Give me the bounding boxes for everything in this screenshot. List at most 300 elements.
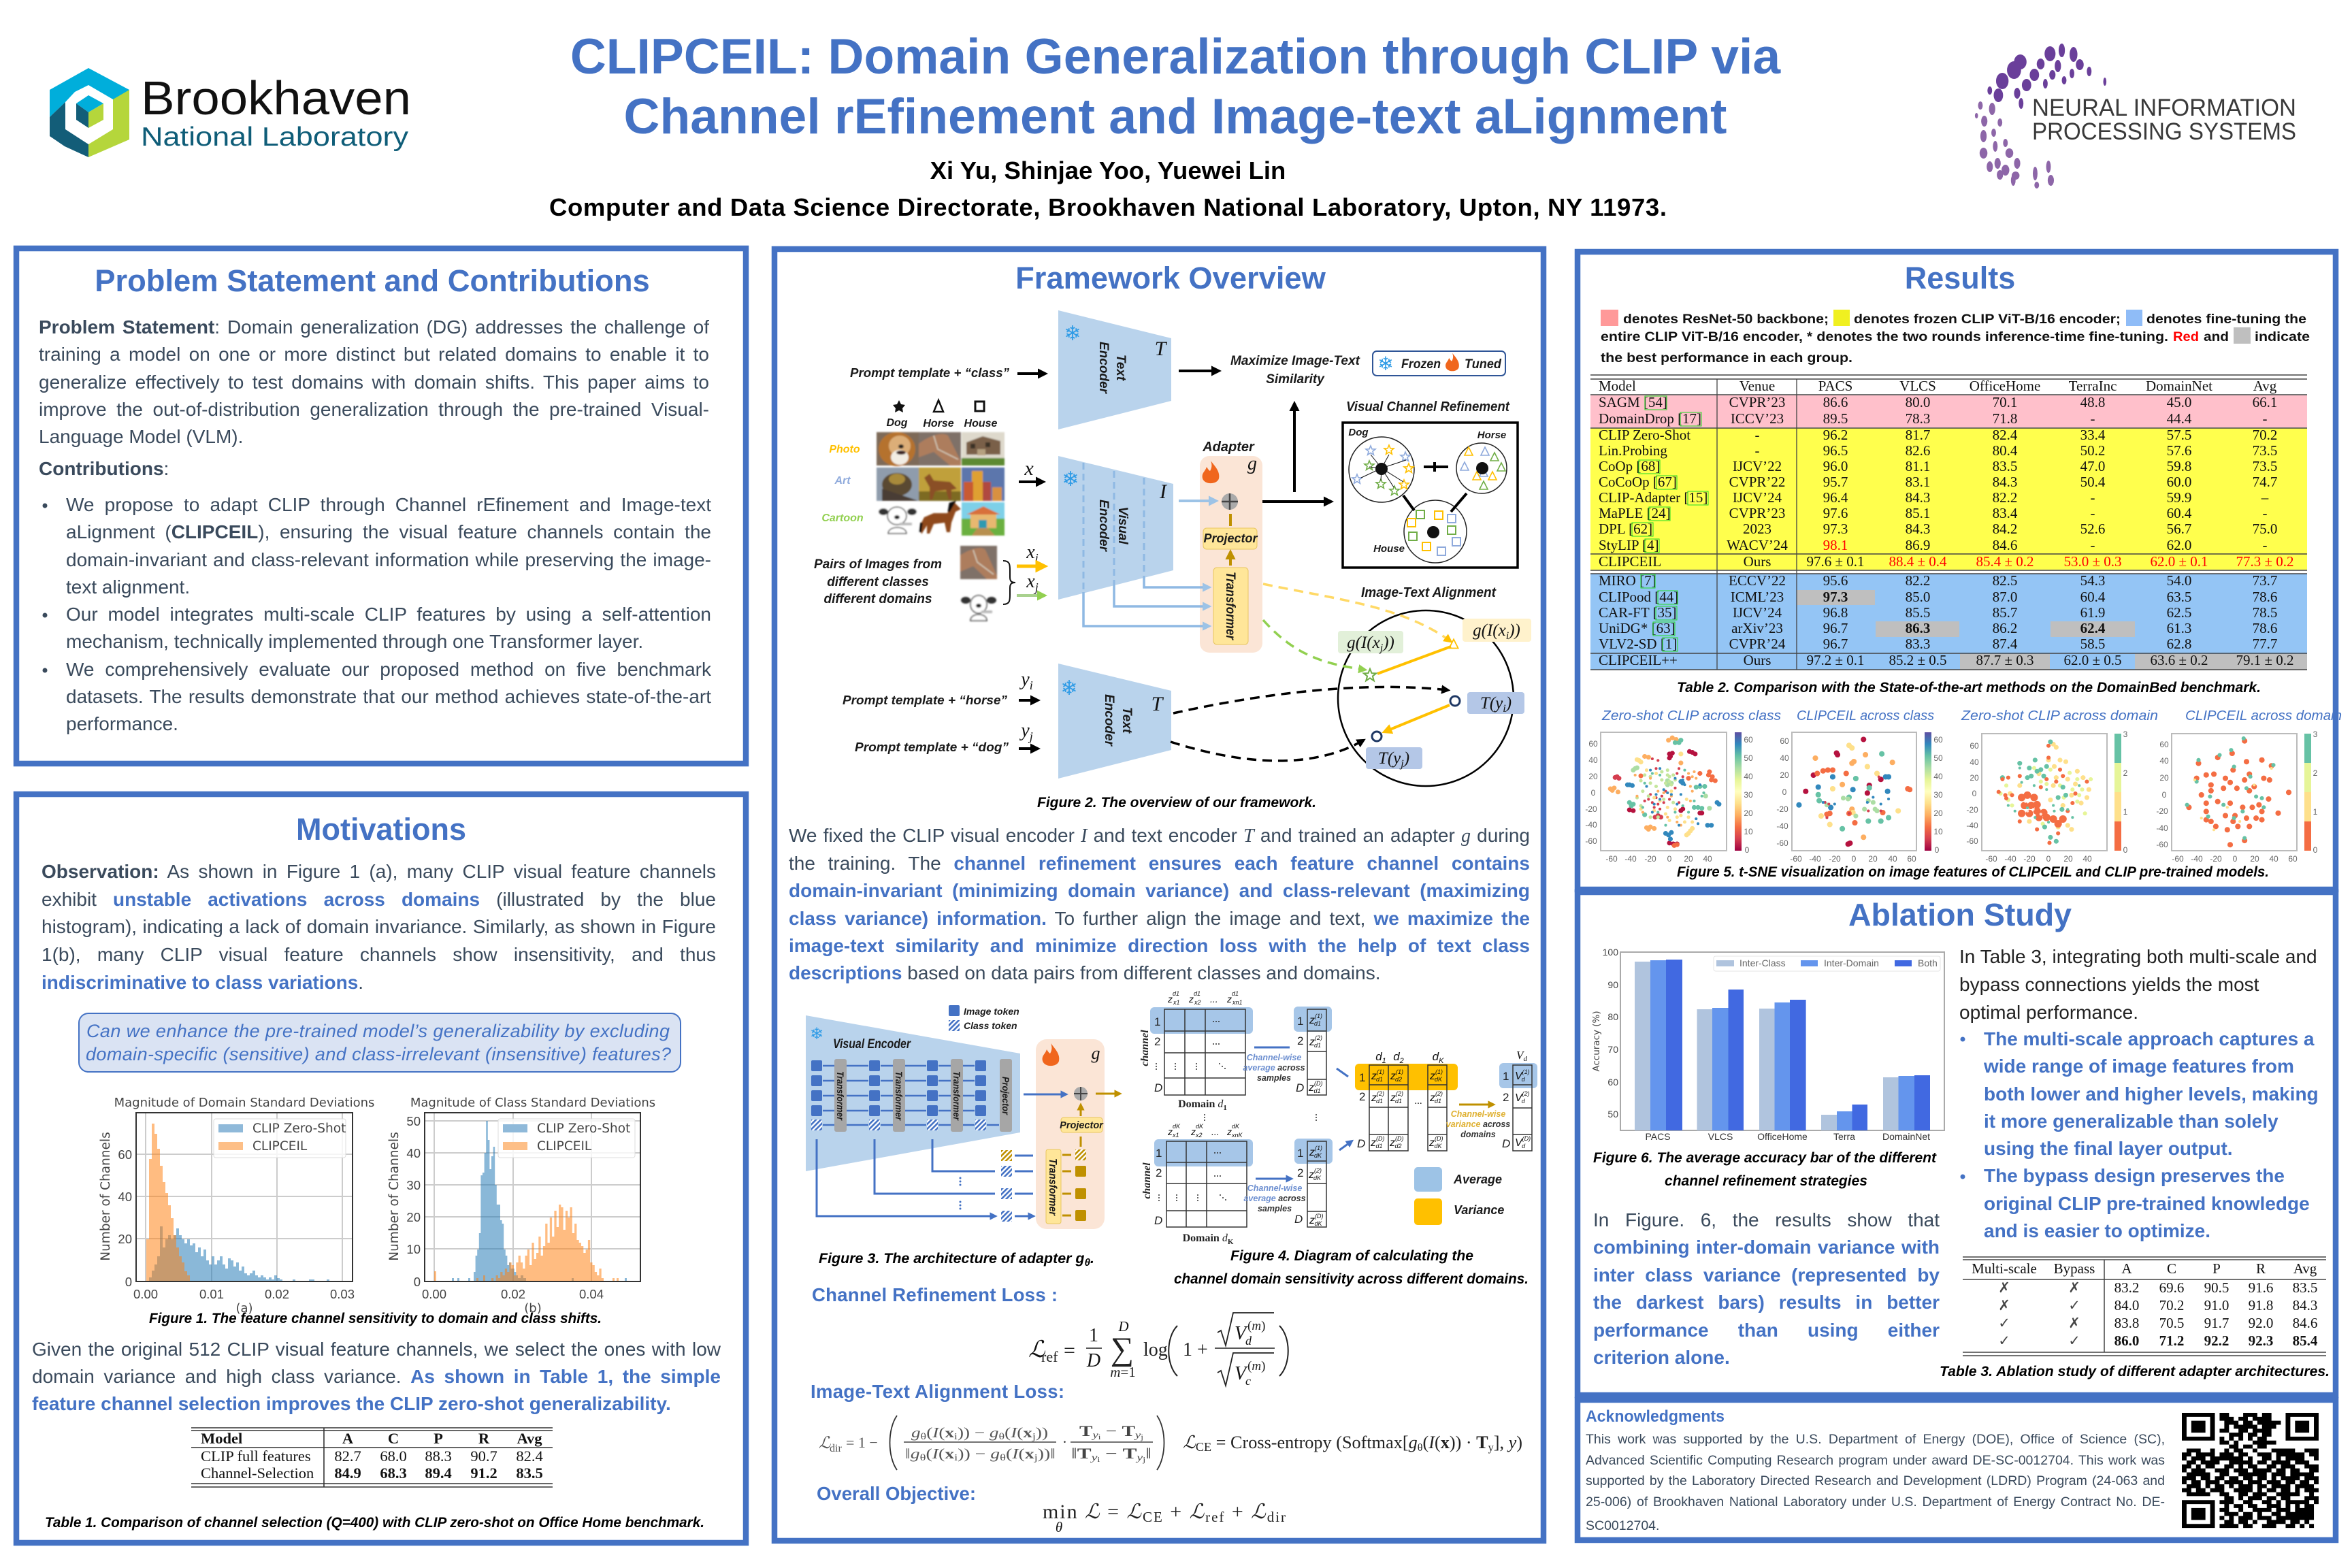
chart: t-SNE zero-shot CLIP across domain: -20: [1966, 805, 1978, 815]
table 2: VLCS: [1899, 378, 1936, 394]
chart: domain standard deviations histogram: 0.02: [265, 1287, 289, 1301]
bottom matrix: 1: [1156, 1147, 1162, 1160]
chart: t-SNE CLIPCEIL across class: 0: [1852, 854, 1857, 864]
chart: t-SNE CLIPCEIL across domain: 60: [2288, 854, 2298, 864]
chart: t-SNE CLIPCEIL across class: 0: [1935, 845, 1940, 855]
bottom matrix: z: [1168, 1126, 1173, 1137]
figure 2: framework diagram: [814, 310, 1531, 786]
panel: Problem Statement and Contributions: [16, 248, 746, 764]
t-SNE titles: CLIPCEIL across class: [1797, 708, 1934, 723]
column vectors: d1: [1314, 1020, 1321, 1027]
chart: class standard deviations histogram: [387, 1096, 655, 1316]
adapter: [1200, 440, 1262, 653]
heading: image-text alignment loss: Image-Text Alignment Loss:: [811, 1381, 1064, 1402]
table 2: -: [1754, 427, 1760, 443]
bottom matrix: K: [1228, 1238, 1234, 1246]
table 2: 60.4: [2080, 589, 2106, 605]
text block: figure 6 discussion: inter class variance (represented by: [1593, 1264, 1940, 1286]
chart: accuracy bars: [1591, 947, 1944, 1142]
table 2: 97.3: [1823, 589, 1848, 605]
legend: tokens: Class token: [964, 1020, 1017, 1031]
text block: problem statement: Language Model (VLM).: [39, 426, 243, 447]
chart: t-SNE zero-shot CLIP across class: 20: [1744, 808, 1753, 818]
table 3: ✓: [1998, 1315, 2010, 1331]
table 3: 91.7: [2204, 1315, 2229, 1331]
table 2: 80.4: [1993, 442, 2018, 459]
table 2: 98.1: [1823, 537, 1848, 553]
column vectors: D: [1296, 1081, 1304, 1094]
text block: acknowledgments: This work was supported by the U.S. Department of Energy (DOE), Office of Science (SC),: [1586, 1432, 2165, 1447]
chart: class standard deviations histogram: Magnitude of Class Standard Deviations: [410, 1096, 655, 1110]
table 2: -: [2262, 505, 2268, 521]
chart: t-SNE CLIPCEIL across class: 20: [1780, 770, 1789, 780]
table 1: CLIP full features: [201, 1448, 311, 1465]
table 2: 62.0 ± 0.1: [2150, 553, 2208, 570]
chart: class standard deviations histogram: 30: [406, 1178, 421, 1192]
table 2: 88.4 ± 0.4: [1889, 553, 1947, 570]
table 2: ICCV’23: [1731, 410, 1784, 427]
legend: average and variance: Average: [1453, 1173, 1502, 1186]
equation: cross entropy: = Cross-entropy (Softmax[: [1211, 1433, 1409, 1452]
chart: class standard deviations histogram: 0.04: [579, 1287, 604, 1301]
table 2: 81.1: [1906, 458, 1930, 474]
variance vector: d: [1522, 1076, 1526, 1083]
panel: Ablation Study: [1578, 892, 2336, 1395]
chart: t-SNE zero-shot CLIP across domain: 0: [2123, 845, 2128, 855]
chart: domain standard deviations histogram: 60: [118, 1147, 132, 1162]
equation: direction loss: ·: [1062, 1434, 1067, 1450]
legend text: entire CLIP ViT-B/16 encoder, * denotes the two rounds inference-time fine-tuning.: [1601, 329, 2168, 344]
table 1: 82.7: [334, 1448, 361, 1465]
panel: visual channel refinement: Dog: [1348, 427, 1369, 438]
equation: refinement loss: log: [1143, 1339, 1168, 1360]
top matrix: [1139, 990, 1253, 1112]
figure 3: adapter architecture: ❄: [810, 1024, 823, 1043]
chart: t-SNE CLIPCEIL across class: 0: [1782, 787, 1787, 797]
table 2: 82.6: [1906, 442, 1930, 459]
class tokens: [1001, 1150, 1012, 1222]
column vectors: (1): [1315, 1013, 1322, 1019]
chart: t-SNE CLIPCEIL across domain: [2156, 730, 2318, 864]
chart: accuracy bars: PACS: [1645, 1131, 1671, 1142]
chart: t-SNE zero-shot CLIP across class: 40: [1744, 772, 1753, 781]
chart: t-SNE CLIPCEIL across domain: 20: [2250, 854, 2259, 864]
equation: refinement loss: V: [1235, 1363, 1248, 1384]
table 1: 90.7: [470, 1448, 497, 1465]
chart: class standard deviations histogram: 0: [414, 1275, 421, 1289]
text block: framework description: We fixed the CLIP visual encoder I and text encoder T and trained an adapter g during: [789, 825, 1530, 847]
panel: Results: [1578, 252, 2342, 889]
equation: direction loss: θ: [1000, 1453, 1006, 1463]
table 3: 86.0: [2114, 1333, 2139, 1349]
table 2: 50.2: [2080, 442, 2105, 459]
figure 6 caption: channel refinement strategies: [1665, 1173, 1867, 1189]
chart: accuracy bars: OfficeHome: [1757, 1131, 1808, 1142]
table 2: 62.8: [2167, 636, 2191, 652]
legend: Both: [1918, 958, 1938, 968]
text block: ablation bullets: it more generalizable than solely: [1984, 1111, 2278, 1132]
figure 1 caption: Figure 1. The feature channel sensitivity to domain and class shifts.: [149, 1311, 602, 1326]
table 3: 90.5: [2204, 1279, 2229, 1296]
top matrix: Domain d: [1178, 1098, 1223, 1110]
table 2: 62.0 ± 0.5: [2063, 652, 2122, 668]
text block: channel selection: [32, 1336, 721, 1421]
chart: domain standard deviations histogram: 0.00: [133, 1287, 158, 1301]
chart: t-SNE CLIPCEIL across domain: 0: [2233, 854, 2238, 864]
figure 4: channel domain sensitivity: [1139, 990, 1537, 1246]
table 2: 85.5: [1906, 604, 1930, 621]
table 2: 75.0: [2253, 521, 2277, 537]
table 2: 85.0: [1906, 589, 1930, 605]
table 2: Ours: [1744, 652, 1771, 668]
table 3: ✓: [1998, 1333, 2010, 1349]
equation: overall objective: +: [1164, 1501, 1188, 1523]
text encoder bottom: ❄: [1060, 676, 1078, 700]
chart: t-SNE CLIPCEIL across domain: 40: [2269, 854, 2278, 864]
token columns: [811, 1060, 986, 1130]
chart: t-SNE zero-shot CLIP across domain: -40: [1966, 821, 1978, 830]
table 3: 92.3: [2249, 1333, 2273, 1349]
chart: t-SNE zero-shot CLIP across class: -40: [1624, 854, 1637, 864]
table 2: 85.2 ± 0.5: [1889, 652, 1947, 668]
brace: [1003, 561, 1015, 604]
table 2: 86.9: [1906, 537, 1930, 553]
callout: Can we enhance the pre-trained model’s generalizability by excluding: [86, 1021, 670, 1041]
text block: observation: [42, 858, 716, 998]
text: contributions heading: Contributions:: [39, 458, 169, 479]
equation: direction loss: θ: [920, 1453, 926, 1463]
chart: t-SNE CLIPCEIL across domain: 0: [2162, 790, 2167, 800]
table 2: 73.5: [2253, 458, 2277, 474]
chart: domain standard deviations histogram: 0: [125, 1275, 132, 1289]
table 2: MIRO [7]: [1599, 572, 1656, 589]
table 2: 97.6: [1823, 505, 1848, 521]
panel: image-text alignment: )): [1507, 621, 1520, 640]
table 3: 83.5: [2293, 1279, 2317, 1296]
column vectors: z: [1309, 1082, 1314, 1094]
table 2: 60.0: [2167, 474, 2191, 490]
chart: t-SNE CLIPCEIL across class: 60: [1907, 854, 1916, 864]
channel-wise average labels: Channel-wise: [1247, 1183, 1302, 1193]
transformer blocks: Transformer: [894, 1071, 904, 1121]
table 2: 82.4: [1993, 427, 2018, 443]
variance matrix: dK: [1435, 1143, 1443, 1149]
text block: channel selection: feature channel selection improves the CLIP zero-shot generalizability.: [32, 1393, 671, 1414]
text block: figure 6 discussion: [1593, 1207, 1940, 1373]
figure 5 caption: Figure 5. t-SNE visualization on image features of CLIPCEIL and CLIP pre-trained models.: [1677, 864, 2269, 880]
table 2: 48.8: [2080, 394, 2105, 410]
chart: t-SNE zero-shot CLIP across domain: 40: [1970, 757, 1979, 767]
variance matrix: d1: [1376, 1143, 1383, 1149]
table 2: 44.4: [2167, 410, 2192, 427]
table 2: 84.3: [1993, 474, 2017, 490]
image pair: [960, 546, 997, 621]
table 2: Venue: [1740, 378, 1775, 394]
equation: direction loss: )) −: [958, 1424, 990, 1441]
chart: t-SNE zero-shot CLIP across class: 40: [1588, 755, 1598, 765]
prompt labels: [843, 366, 1009, 754]
variance vector: 2: [1503, 1091, 1509, 1104]
icon: NeurIPS dots: [1975, 44, 2106, 189]
variance matrix: d: [1393, 1050, 1400, 1063]
text encoder bottom: Text: [1120, 707, 1134, 734]
table 2: 70.2: [2253, 427, 2277, 443]
equation: direction loss: I(x: [932, 1424, 952, 1441]
table 2: 86.2: [1993, 620, 2017, 636]
figure 3 caption: .: [1090, 1251, 1094, 1267]
equation: direction loss: i: [954, 1453, 958, 1463]
prompt labels: Prompt template + “dog”: [855, 740, 1009, 754]
heading: Problem Statement and Contributions: [95, 263, 650, 298]
column vectors: d1: [1314, 1042, 1321, 1049]
legend text: the best performance in each group.: [1601, 350, 1852, 365]
variance vector: (D): [1522, 1135, 1531, 1142]
chart: domain standard deviations histogram: [99, 1096, 374, 1316]
top matrix: d1: [1232, 990, 1239, 997]
legend text: denotes ResNet-50 backbone;: [1623, 312, 1829, 327]
legend: [214, 1119, 346, 1158]
equation: direction loss: ‖: [1145, 1445, 1152, 1462]
equation: direction loss: j: [1142, 1456, 1145, 1464]
chart: t-SNE zero-shot CLIP across domain: 1: [2123, 807, 2128, 817]
table 2: CoCoOp [67]: [1599, 474, 1677, 490]
chart: t-SNE zero-shot CLIP across class: 60: [1744, 735, 1753, 745]
chart: t-SNE CLIPCEIL across class: 20: [1868, 854, 1878, 864]
equation: direction loss: y: [1133, 1431, 1141, 1441]
variance matrix: z: [1429, 1137, 1435, 1149]
labels: yi yj: y: [1021, 669, 1030, 690]
heading: Ablation Study: [1848, 897, 2072, 932]
column vectors: (D): [1315, 1213, 1323, 1220]
variance vector: d: [1522, 1143, 1526, 1149]
chart: t-SNE zero-shot CLIP across domain: -60: [1985, 854, 1997, 864]
text: pairs of images: [814, 557, 942, 606]
table 2: –: [2261, 489, 2269, 506]
variance vector: V: [1515, 1137, 1522, 1149]
text: x label: x: [1024, 457, 1034, 480]
table 2: 59.8: [2167, 458, 2191, 474]
panel: image-text alignment: ): [1505, 694, 1512, 713]
table 2: -: [2091, 489, 2095, 506]
chart: t-SNE zero-shot CLIP across domain: 60: [1970, 741, 1979, 751]
logo wordmark: Brookhaven: [141, 71, 411, 125]
equation: direction loss: y: [1135, 1453, 1143, 1463]
chart: t-SNE zero-shot CLIP across domain: 40: [2082, 854, 2092, 864]
table 2: 63.6 ± 0.2: [2150, 652, 2208, 668]
chart: t-SNE CLIPCEIL across domain: 0: [2313, 845, 2318, 855]
legend: CLIPCEIL: [252, 1139, 308, 1154]
table 2: 96.4: [1823, 489, 1848, 506]
table 2: 78.3: [1906, 410, 1930, 427]
table 2: 85.1: [1906, 505, 1930, 521]
table 2: 57.5: [2167, 427, 2191, 443]
table 2: 60.4: [2167, 505, 2192, 521]
bottom matrix: xnK: [1231, 1132, 1243, 1139]
chart: t-SNE CLIPCEIL across class: -60: [1790, 854, 1802, 864]
variance matrix: d1: [1435, 1098, 1441, 1105]
equation: direction loss: ‖g: [905, 1446, 917, 1462]
column vectors: 2: [1297, 1166, 1303, 1179]
transformer blocks: [834, 1059, 1012, 1132]
adapter: Transformer: [1047, 1158, 1058, 1216]
text block: channel selection: domain variance and high class variance. As shown in Table 1, the simple: [32, 1366, 721, 1387]
chart: t-SNE zero-shot CLIP across class: 10: [1744, 827, 1753, 836]
table 3: 84.0: [2114, 1297, 2139, 1313]
chart: t-SNE zero-shot CLIP across class: 40: [1703, 854, 1712, 864]
text block: contributions: performance.: [66, 713, 178, 734]
table 2: TerraInc: [2069, 378, 2117, 394]
table 2: -: [1754, 442, 1760, 459]
chart: t-SNE CLIPCEIL across class: -40: [1809, 854, 1821, 864]
table 2: VLV2-SD [1]: [1599, 636, 1677, 652]
panel: image-text alignment: [1171, 584, 1531, 786]
table 2: 83.3: [1906, 636, 1930, 652]
table 2: DomainNet: [2146, 378, 2212, 394]
variance vector: (2): [1522, 1090, 1530, 1097]
table 2: 82.2: [1906, 572, 1930, 589]
callout: domain-specific (sensitive) and class-irrelevant (insensitive) features?: [86, 1044, 671, 1064]
table 2: 78.6: [2253, 589, 2277, 605]
chart: t-SNE zero-shot CLIP across domain: 0: [2046, 854, 2051, 864]
legend: frozen and tuned: [1373, 351, 1505, 376]
adapter: g: [1092, 1043, 1100, 1063]
text: pairs of images: different classes: [827, 575, 929, 589]
table 2: 96.7: [1823, 620, 1848, 636]
channel-wise average labels: Channel-wise: [1247, 1053, 1301, 1062]
table 2: 47.0: [2080, 458, 2105, 474]
text block: table 3 intro: bypass connections yields the most: [1959, 974, 2259, 995]
variance matrix: d2: [1395, 1076, 1402, 1083]
variance matrix: 2: [1399, 1057, 1404, 1065]
adapter: Transformer: [1223, 572, 1237, 640]
panel: visual channel refinement: House: [1373, 543, 1405, 555]
variance matrix: z: [1390, 1071, 1396, 1082]
panel: image-text alignment: g(I(x: [1473, 621, 1506, 640]
equation: cross entropy: ],: [1494, 1433, 1509, 1452]
equation: refinement loss: 1 +: [1183, 1339, 1208, 1360]
table 2: -: [2262, 537, 2268, 553]
variance matrix: d2: [1395, 1143, 1402, 1149]
text block: acknowledgments: [1586, 1429, 2165, 1538]
prompt labels: Prompt template + “horse”: [843, 693, 1007, 707]
chart: domain standard deviations histogram: Magnitude of Domain Standard Deviations: [114, 1096, 374, 1110]
channel-wise variance labels: domains: [1460, 1130, 1496, 1139]
chart: t-SNE zero-shot CLIP across class: -60: [1585, 836, 1597, 846]
equation: overall objective: [1043, 1501, 1286, 1535]
top matrix: 1: [1223, 1104, 1227, 1112]
table 2: 66.1: [2253, 394, 2277, 410]
equation: refinement loss: ∑: [1111, 1331, 1134, 1367]
text block: contributions: [66, 491, 711, 740]
authors: Xi Yu, Shinjae Yoo, Yuewei Lin: [930, 157, 1286, 184]
t-SNE titles: Zero-shot CLIP across class: [1601, 708, 1781, 723]
chart: t-SNE CLIPCEIL across class: 10: [1933, 827, 1943, 836]
table 1: Model: [201, 1430, 242, 1447]
variance matrix: K: [1439, 1057, 1444, 1065]
bottom matrix: [1141, 1114, 1317, 1246]
chart: t-SNE zero-shot CLIP across class: -20: [1585, 804, 1597, 814]
panel: image-text alignment: i: [1503, 703, 1506, 715]
table 2: 62.5: [2167, 604, 2191, 621]
top matrix: x2: [1194, 999, 1201, 1006]
variance matrix: [1355, 1050, 1458, 1151]
column vectors: 1: [1297, 1147, 1303, 1160]
text block: problem statement: improve the out-of-distribution generalization through the pre-trained Visual-: [39, 399, 709, 420]
table 3 caption: Table 3. Ablation study of different adapter architectures.: [1940, 1364, 2330, 1379]
equation: refinement loss: ℒ: [1028, 1337, 1046, 1362]
table 2: 54.0: [2167, 572, 2191, 589]
chart: t-SNE CLIPCEIL across class: 40: [1780, 753, 1789, 763]
variance vector: V: [1515, 1071, 1522, 1082]
text block: framework description: image-text similarity and minimize direction loss with the help of text class: [789, 935, 1530, 956]
column vectors: (2): [1315, 1034, 1322, 1041]
equation: direction loss: [819, 1416, 1164, 1470]
table 2: CAR-FT [35]: [1599, 604, 1677, 621]
text block: contributions: mechanism, technically implemented through one Transformer layer.: [66, 631, 643, 652]
equation: direction loss: ℒ: [819, 1435, 831, 1452]
figure 3 caption: θ: [1084, 1257, 1091, 1269]
top matrix: D: [1154, 1081, 1162, 1094]
chart: t-SNE zero-shot CLIP across class: -60: [1605, 854, 1618, 864]
chart: domain standard deviations histogram: (a): [235, 1301, 253, 1316]
icon: Brookhaven hexagon: [50, 68, 129, 157]
variance vector: d: [1523, 1055, 1527, 1063]
top matrix: xn1: [1232, 999, 1243, 1006]
equation: direction loss: g: [990, 1424, 999, 1441]
legend: CLIPCEIL: [537, 1139, 592, 1154]
column vectors: D: [1294, 1213, 1303, 1226]
table 2: 85.4 ± 0.2: [1976, 553, 2034, 570]
chart: domain standard deviations histogram: Number of Channels: [99, 1132, 113, 1261]
variance matrix: (2): [1377, 1090, 1384, 1097]
table 3: 92.0: [2249, 1315, 2273, 1331]
bottom matrix: dK: [1173, 1123, 1181, 1130]
table 2: CLIPCEIL++: [1599, 652, 1678, 668]
figure 3: adapter architecture: Visual Encoder: [833, 1037, 911, 1051]
chart: t-SNE CLIPCEIL across domain: -60: [2172, 854, 2184, 864]
text block: ablation bullets: original CLIP pre-trained knowledge: [1984, 1193, 2310, 1214]
chart: t-SNE zero-shot CLIP across class: 30: [1744, 790, 1753, 800]
panel: image-text alignment: T(y: [1480, 694, 1503, 713]
table 2: 78.5: [2253, 604, 2277, 621]
chart: t-SNE CLIPCEIL across domain: 20: [2159, 773, 2169, 783]
chart: t-SNE zero-shot CLIP across class: -40: [1585, 820, 1597, 830]
channel-wise average labels: average across: [1243, 1194, 1306, 1203]
table 3: [1963, 1257, 2326, 1356]
image grid: [877, 432, 1004, 536]
title: CLIPCEIL: Domain Generalization through CLIP via: [570, 29, 1781, 84]
equation: refinement loss: V: [1235, 1323, 1248, 1344]
figure 4 caption: [1174, 1248, 1529, 1287]
text encoder top: Text: [1113, 355, 1128, 381]
table 3: 83.2: [2114, 1279, 2139, 1296]
table 2: 82.2: [1993, 489, 2017, 506]
column vectors: z: [1309, 1215, 1315, 1226]
chart: t-SNE CLIPCEIL across domain: 2: [2313, 768, 2318, 778]
table 2: 52.6: [2080, 521, 2105, 537]
labels: yi yj: i: [1030, 679, 1033, 692]
chart: t-SNE zero-shot CLIP across domain: -40: [2004, 854, 2016, 864]
table 2: WACV’24: [1727, 537, 1788, 553]
chart: t-SNE zero-shot CLIP across domain: -60: [1966, 836, 1978, 846]
equation: direction loss: θ: [921, 1432, 927, 1442]
heading: Motivations: [296, 812, 466, 847]
table 2: 50.4: [2080, 474, 2106, 490]
figure 3: adapter architecture: [806, 1005, 1120, 1229]
legend: tokens: Image token: [964, 1006, 1019, 1017]
table 2: 83.1: [1906, 474, 1930, 490]
legend: average and variance: [1414, 1167, 1504, 1225]
